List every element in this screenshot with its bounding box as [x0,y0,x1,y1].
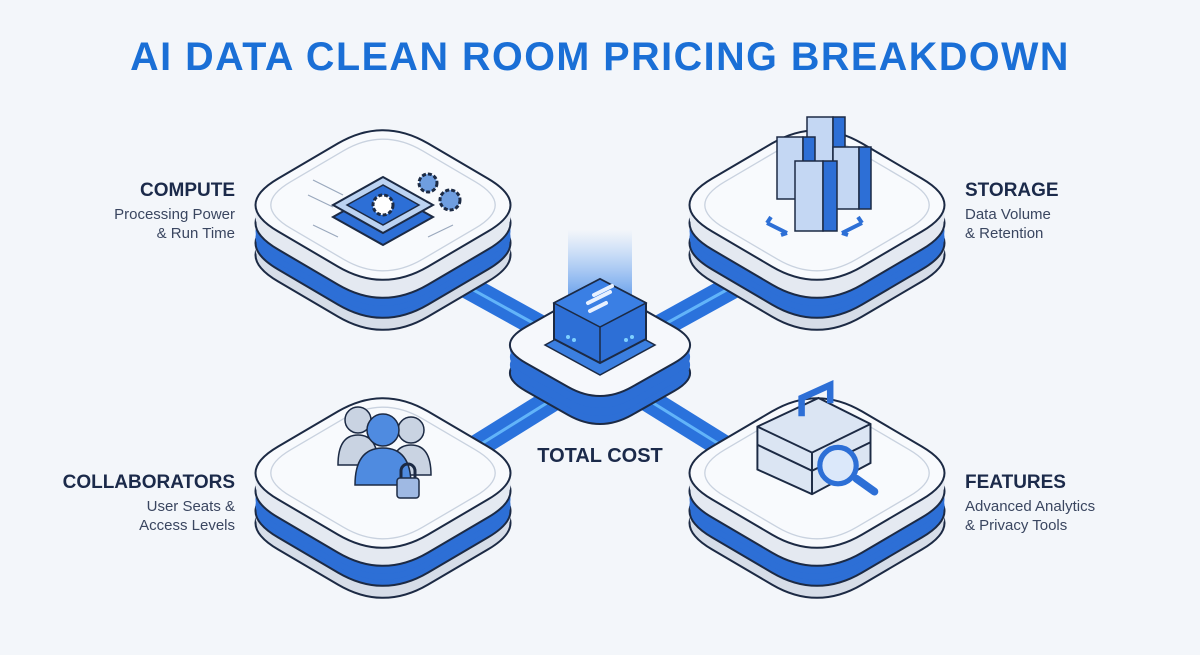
label: compute [114,180,235,242]
label: compute: COMPUTE [140,180,235,201]
icon: chip with gears [308,174,460,245]
label: storage: Data Volume [965,206,1051,223]
label: storage [965,180,1059,242]
platform: storage [690,117,944,330]
label: storage: & Retention [965,225,1043,242]
label: compute: & Run Time [157,225,235,242]
label: compute: Processing Power [114,206,235,223]
title: AI DATA CLEAN ROOM PRICING BREAKDOWN [130,35,1070,79]
connector beams [383,240,817,505]
label: features: & Privacy Tools [965,517,1067,534]
icon: people with lock [338,407,431,498]
label: collaborators: COLLABORATORS [63,472,235,493]
label: collaborators [63,472,235,534]
label: storage: STORAGE [965,180,1059,201]
icon: servers [767,117,871,235]
label: features: FEATURES [965,472,1066,493]
platform: features [690,385,944,598]
label: collaborators: User Seats & [147,498,235,515]
platform: compute [256,130,510,330]
hub: total cost [510,230,690,424]
label: collaborators: Access Levels [139,517,235,534]
platform: collaborators [256,398,510,598]
icon: toolbox with magnifier [757,385,874,494]
label: features: Advanced Analytics [965,498,1095,515]
label: features [965,472,1095,534]
label: total cost: TOTAL COST [537,445,663,467]
